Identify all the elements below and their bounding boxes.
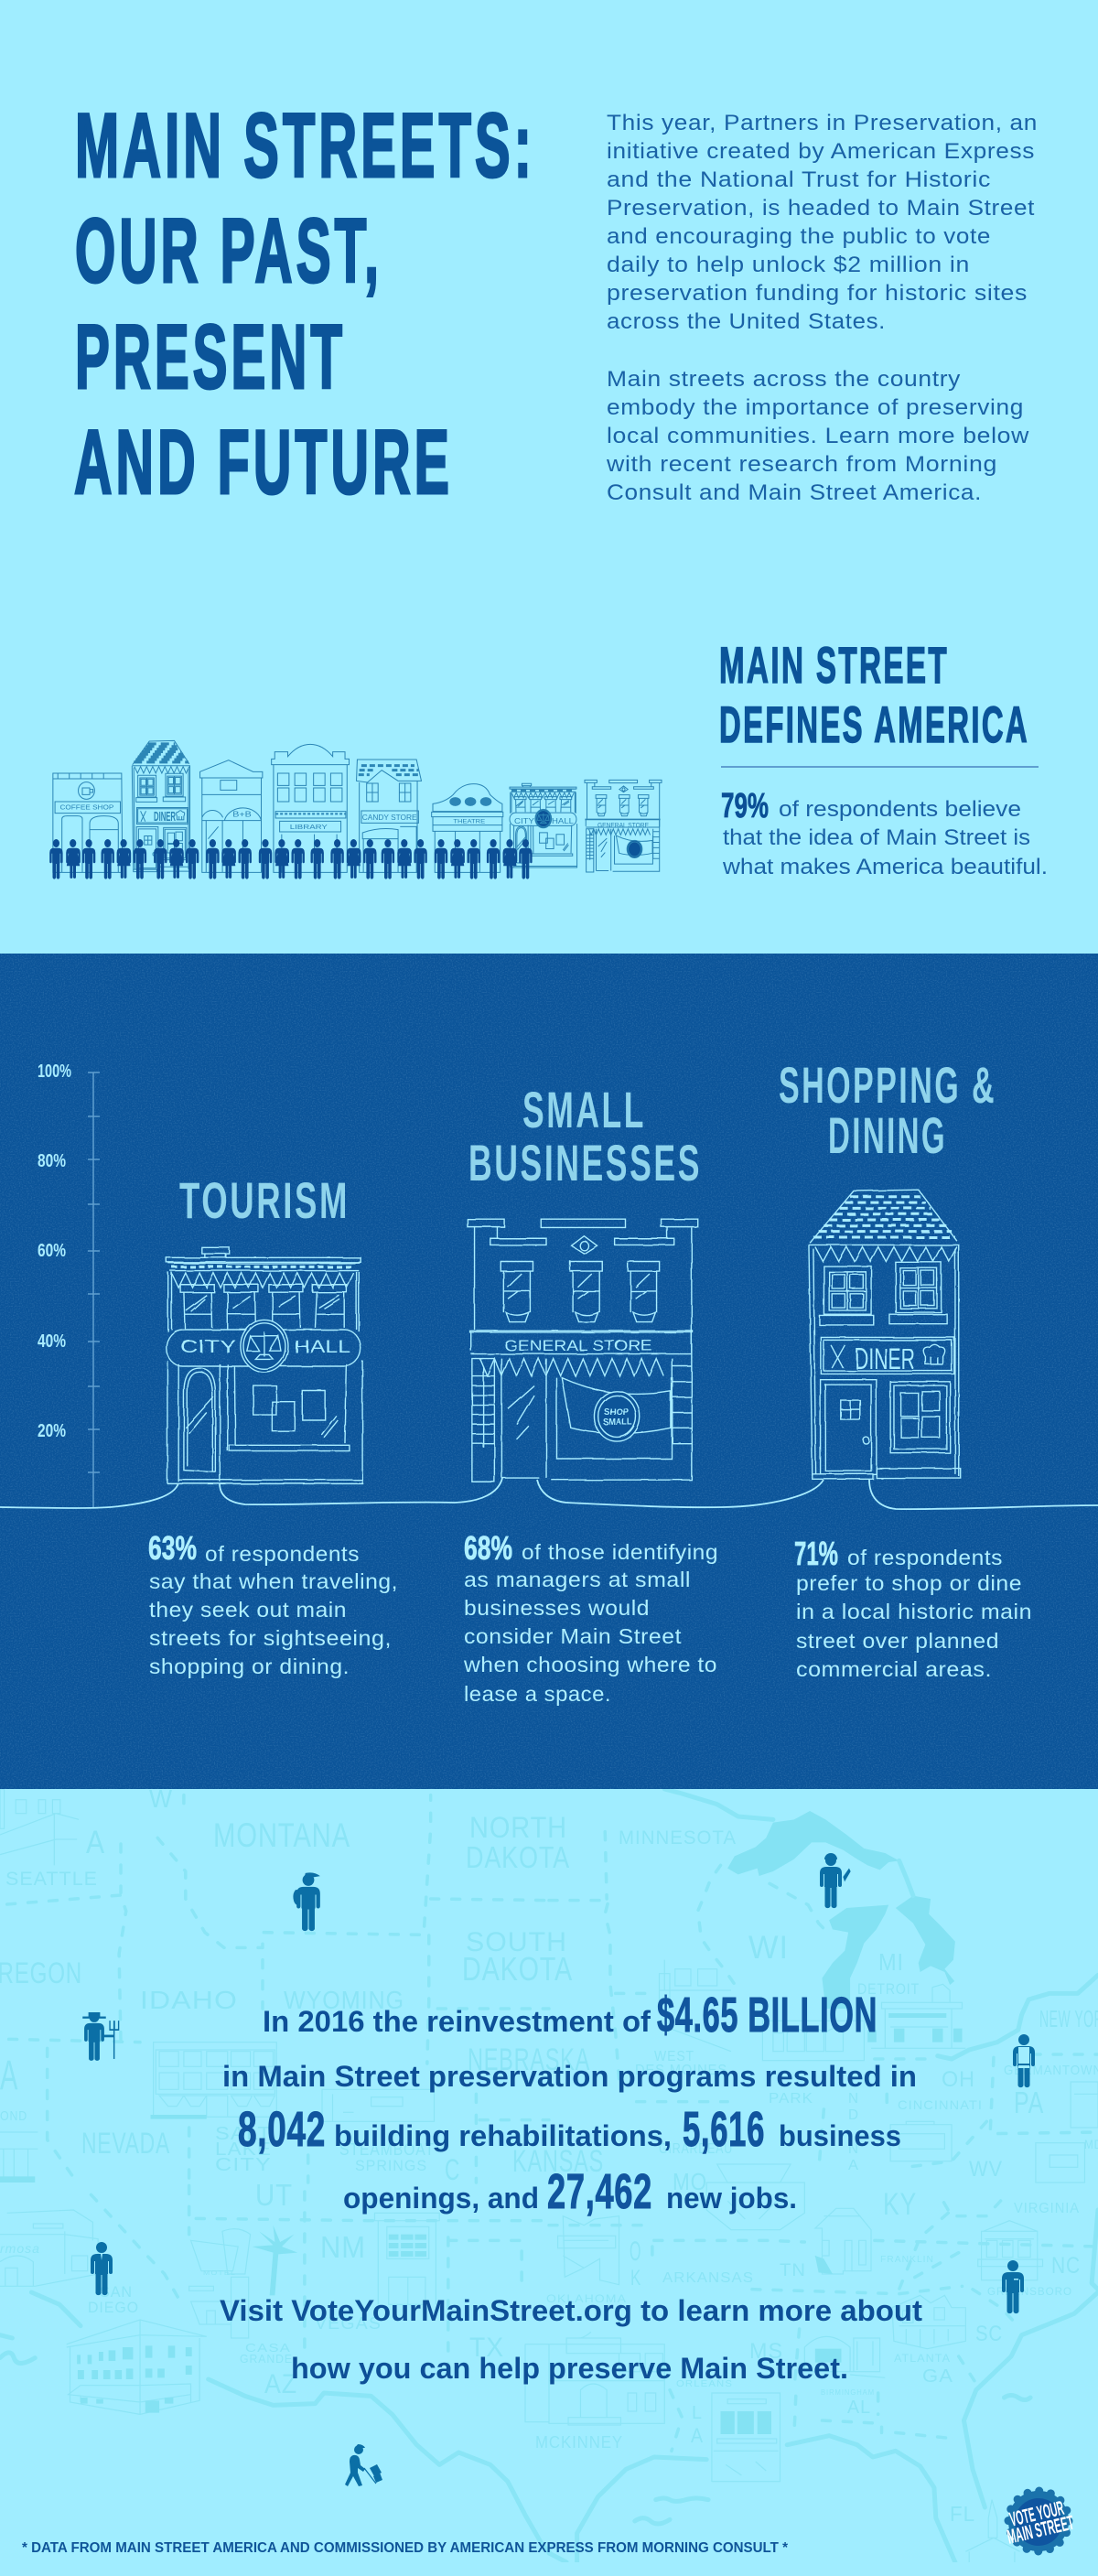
heading: Main Street defines America: MAIN STREET xyxy=(719,636,949,694)
map: state and city labels: MCKINNEY xyxy=(535,2433,623,2452)
icon: man in suit xyxy=(91,2242,113,2295)
icon: delivery person with hand truck xyxy=(345,2444,382,2486)
map: state and city labels: NEVADA xyxy=(81,2127,170,2160)
map: state and city labels: NORTH xyxy=(469,1811,567,1844)
stat: small businesses 68 percent: of those identifying xyxy=(522,1540,718,1564)
intro text block xyxy=(606,111,1038,505)
main statement text: new jobs. xyxy=(666,2182,797,2215)
map: state and city labels: L xyxy=(692,2403,703,2423)
map: state and city labels: CASA xyxy=(245,2341,291,2355)
map: state and city labels: ATLANTA xyxy=(894,2352,951,2365)
stat: small businesses 68 percent: consider Main Street xyxy=(464,1624,682,1648)
stat: shopping 71 percent: street over planned xyxy=(796,1629,999,1653)
main statement text: $4.65 BILLION xyxy=(657,1988,877,2042)
map: state and city labels: MO xyxy=(673,2168,707,2195)
main statement text: 27,462 xyxy=(547,2164,652,2219)
building: general store: GENERAL STORE xyxy=(597,821,649,829)
stat: tourism 63 percent: 63% xyxy=(148,1529,197,1567)
title: OUR PAST, xyxy=(75,199,382,301)
title: AND FUTURE xyxy=(74,411,453,512)
intro text block: local communities. Learn more below xyxy=(607,424,1029,448)
map: state and city labels: WEST xyxy=(654,2049,694,2064)
map: state and city labels: GRANDE xyxy=(240,2352,293,2366)
main statement text: 5,616 xyxy=(683,2102,765,2157)
map: state and city labels: DAKOTA xyxy=(462,1950,573,1988)
main statement text: 8,042 xyxy=(238,2102,326,2157)
illustration: row of main street buildings xyxy=(53,740,662,872)
map: state and city labels: ARKANSAS xyxy=(662,2270,754,2286)
stat: 79 percent: what makes America beautiful. xyxy=(722,855,1048,879)
illustration: general store: GENERAL STORE xyxy=(504,1337,652,1354)
map: state and city labels: UT xyxy=(255,2178,293,2212)
building: general store xyxy=(585,780,662,872)
map: state and city labels: AL xyxy=(847,2398,871,2418)
intro text block: preservation funding for historic sites xyxy=(607,281,1028,306)
map: state and city labels: DES MOINES xyxy=(635,2063,727,2078)
main statement text: building rehabilitations, xyxy=(334,2119,672,2152)
heading: shopping and dining: DINING xyxy=(828,1106,947,1164)
map: state and city labels: FL xyxy=(950,2502,975,2526)
building: diner xyxy=(132,740,190,872)
map: state and city labels: PARK xyxy=(769,2091,813,2107)
map: state and city labels: MI xyxy=(878,1948,904,1976)
map: dashed state borders xyxy=(7,1795,1098,2451)
main statement text: openings, and xyxy=(343,2182,539,2215)
map: state and city labels: I xyxy=(846,2075,859,2090)
map: state and city labels: MOTEL xyxy=(203,2270,236,2277)
intro text block: with recent research from Morning xyxy=(606,452,997,477)
stat: shopping 71 percent: 71% xyxy=(794,1535,838,1572)
map: state and city labels: IDAHO xyxy=(140,1986,238,2014)
chart axis xyxy=(38,1062,100,1507)
stat: tourism 63 percent: say that when traveling, xyxy=(149,1569,398,1593)
illustration: city hall: HALL xyxy=(294,1338,350,1357)
map: state and city labels: OND xyxy=(0,2108,27,2124)
intro text block: daily to help unlock $2 million in xyxy=(607,253,970,277)
map: state and city labels: CITY xyxy=(215,2155,272,2175)
map: state and city labels: VEGAS xyxy=(315,2314,382,2333)
call to action text: how you can help preserve Main Street. xyxy=(291,2352,848,2385)
stat: tourism 63 percent: they seek out main xyxy=(149,1598,347,1622)
map: state and city labels: K xyxy=(630,2266,641,2290)
stat: small businesses 68 percent: when choosing where to xyxy=(463,1653,717,1676)
illustration: city hall: CITY xyxy=(180,1338,236,1357)
intro text block: Consult and Main Street America. xyxy=(607,480,982,505)
main statement text xyxy=(222,1988,917,2219)
heading: Main Street defines America xyxy=(719,636,1029,753)
other storefronts: CANDY STORE xyxy=(362,814,417,823)
map: state and city labels: A xyxy=(848,2158,859,2173)
badge: Vote Your Main Street seal xyxy=(1001,2491,1076,2551)
map: state and city labels: SC xyxy=(975,2322,1003,2346)
heading: small businesses: SMALL xyxy=(522,1081,646,1138)
heading: small businesses: BUSINESSES xyxy=(468,1134,702,1191)
map: state and city labels: LAKE xyxy=(215,2139,272,2160)
map: state and city labels: DETROIT xyxy=(857,1980,920,1998)
icon: mail carrier xyxy=(293,1872,320,1931)
map: state and city labels: rmosa xyxy=(0,2241,40,2256)
stat: 79 percent: of respondents believe xyxy=(779,797,1021,822)
map: state and city labels: N xyxy=(848,2141,859,2157)
map: state and city labels: TN xyxy=(780,2261,806,2280)
map: state and city labels xyxy=(0,1784,1098,2526)
stat: small businesses 68 percent: lease a space. xyxy=(464,1682,611,1706)
map: state and city labels: WV xyxy=(969,2157,1003,2182)
intro text block: Preservation, is headed to Main Street xyxy=(607,196,1035,221)
map: state and city labels: SALT xyxy=(215,2124,272,2144)
intro text block: and encouraging the public to vote xyxy=(607,224,991,249)
map: state and city labels: OH xyxy=(942,2067,975,2092)
other storefronts xyxy=(53,744,503,872)
stat: small businesses 68 percent: businesses would xyxy=(464,1596,650,1620)
map: state and city labels: A xyxy=(691,2424,704,2447)
stat: tourism 63 percent xyxy=(148,1529,398,1678)
chart axis: 20% xyxy=(38,1421,66,1441)
map: state and city labels: WI xyxy=(748,1930,789,1966)
map: state and city labels: PA xyxy=(1014,2086,1044,2119)
map: state and city labels: AZ xyxy=(264,2369,297,2399)
building: diner: DINER xyxy=(154,809,176,825)
map: state and city labels: TX xyxy=(469,2333,504,2363)
map: state and city labels: NC xyxy=(1051,2253,1081,2279)
intro text block: and the National Trust for Historic xyxy=(607,167,991,192)
other storefronts: LIBRARY xyxy=(290,823,328,831)
intro text block: initiative created by American Express xyxy=(607,139,1035,164)
intro text block: Main streets across the country xyxy=(607,367,961,392)
source footnote: * DATA FROM MAIN STREET AMERICA AND COMMISSIONED BY AMERICAN EXPRESS FROM MORNING CONSULT * xyxy=(22,2540,789,2556)
stat: small businesses 68 percent xyxy=(463,1529,718,1706)
map: state and city labels: SPRINGS xyxy=(355,2157,427,2174)
map: state and city labels: SAN xyxy=(100,2283,133,2301)
map: state and city labels: DIEGO xyxy=(88,2299,139,2316)
stat: 79 percent: 79% xyxy=(721,787,769,825)
map: state and city labels: DAKOTA xyxy=(466,1840,570,1874)
heading: small businesses xyxy=(468,1081,702,1191)
title xyxy=(74,94,535,512)
panel: faint United States map background xyxy=(0,1784,1098,2564)
stat: shopping 71 percent: in a local historic main xyxy=(796,1600,1032,1623)
map: state and city labels: NEBRASKA xyxy=(468,2042,590,2077)
other storefronts: B+B xyxy=(232,811,252,819)
stat: shopping 71 percent: prefer to shop or dine xyxy=(796,1571,1022,1595)
chart axis: 40% xyxy=(38,1331,66,1352)
call to action text: Visit VoteYourMainStreet.org to learn more about xyxy=(220,2294,922,2327)
illustration: diner: DINER xyxy=(855,1342,915,1375)
map: state and city labels: MINNESOTA xyxy=(619,1827,737,1848)
stat: tourism 63 percent: streets for sightseeing, xyxy=(149,1626,392,1650)
map: state and city labels: N xyxy=(848,2091,859,2107)
intro text block: embody the importance of preserving xyxy=(607,395,1024,420)
stat: small businesses 68 percent: as managers at small xyxy=(464,1568,691,1591)
stat: 79 percent xyxy=(721,787,1048,879)
map: state and city labels: STEAMBOAT xyxy=(339,2140,435,2159)
map: state and city labels: C xyxy=(445,2153,460,2186)
map: state and city labels: MONTANA xyxy=(213,1816,350,1854)
map: state and city labels: W xyxy=(149,1784,173,1813)
main statement text: in Main Street preservation programs resulted in xyxy=(222,2060,917,2093)
stat: shopping 71 percent xyxy=(794,1535,1032,1681)
illustration: city hall xyxy=(167,1247,363,1483)
map: state and city labels: O xyxy=(630,2236,641,2267)
stat: tourism 63 percent: of respondents xyxy=(205,1542,360,1566)
title: MAIN STREETS: xyxy=(75,94,535,196)
illustration: general store: SHOP xyxy=(604,1407,629,1417)
illustration: diner xyxy=(809,1190,961,1479)
chart axis: 60% xyxy=(38,1241,66,1261)
map: lakes and rivers xyxy=(0,1789,1098,2562)
map: state and city labels: CINCINNATI xyxy=(898,2097,983,2112)
map: state and city labels: KY xyxy=(883,2187,917,2222)
illustration: general store: SMALL xyxy=(603,1417,632,1428)
map: state and city labels: D xyxy=(848,2107,859,2123)
map: state and city labels: GA xyxy=(922,2366,953,2387)
other storefronts: THEATRE xyxy=(453,817,485,825)
illustration: general store xyxy=(468,1219,698,1482)
call to action text xyxy=(220,2294,922,2385)
intro text block: This year, Partners in Preservation, an xyxy=(607,111,1038,135)
title: PRESENT xyxy=(75,306,346,407)
building: city hall xyxy=(510,783,577,868)
icon: construction worker xyxy=(820,1853,851,1908)
map: state and city labels: VIRGINIA xyxy=(1014,2201,1080,2216)
stat: tourism 63 percent: shopping or dining. xyxy=(149,1654,350,1678)
building: city hall: HALL xyxy=(552,817,575,825)
map: state and city labels: ORLEANS xyxy=(676,2379,733,2389)
map: state and city labels: NM xyxy=(320,2230,366,2264)
map: state and city labels: BIRMINGHAM xyxy=(821,2388,875,2397)
stat: shopping 71 percent: of respondents xyxy=(847,1546,1003,1569)
map: state and city labels: WYOMING xyxy=(284,1986,404,2014)
main statement text: In 2016 the reinvestment of xyxy=(263,2005,651,2038)
map: state and city labels: SEATTLE xyxy=(5,1869,98,1890)
intro text block: across the United States. xyxy=(607,309,886,334)
building: city hall: CITY xyxy=(514,817,535,825)
heading: shopping and dining xyxy=(779,1056,996,1164)
map: state and city labels: OKLAHOMA xyxy=(546,2292,627,2305)
icon: shopkeeper with apron xyxy=(1013,2034,1035,2087)
icon: farmer xyxy=(82,2012,119,2061)
icon: clerk xyxy=(1002,2260,1024,2313)
map: state and city labels: FRANKLIN xyxy=(880,2255,934,2265)
map: state and city labels: A xyxy=(0,2052,18,2098)
other storefronts: COFFEE SHOP xyxy=(59,803,114,811)
main statement text: business xyxy=(779,2119,901,2152)
stat: small businesses 68 percent: 68% xyxy=(464,1529,512,1567)
map: state and city labels: GIRARDEAU xyxy=(659,2141,733,2157)
map: faint buildings xyxy=(0,1789,1098,2564)
panel: dark blue statistics band xyxy=(0,954,1098,1789)
map: state and city labels: SOUTH xyxy=(466,1927,567,1957)
map: state and city labels: MS xyxy=(749,2339,783,2364)
stat: shopping 71 percent: commercial areas. xyxy=(796,1657,992,1681)
illustration: row of people holding hands xyxy=(49,839,533,879)
stat: 79 percent: that the idea of Main Street is xyxy=(723,825,1030,850)
chart axis: 80% xyxy=(38,1151,66,1171)
street line connecting the buildings xyxy=(0,1478,1098,1509)
map: state and city labels: KANSAS xyxy=(512,2144,604,2179)
heading: tourism: TOURISM xyxy=(179,1171,350,1229)
chart axis: 100% xyxy=(38,1062,71,1082)
map: state and city labels: GREENSBORO xyxy=(987,2285,1072,2298)
map: state and city labels: A xyxy=(86,1825,105,1860)
